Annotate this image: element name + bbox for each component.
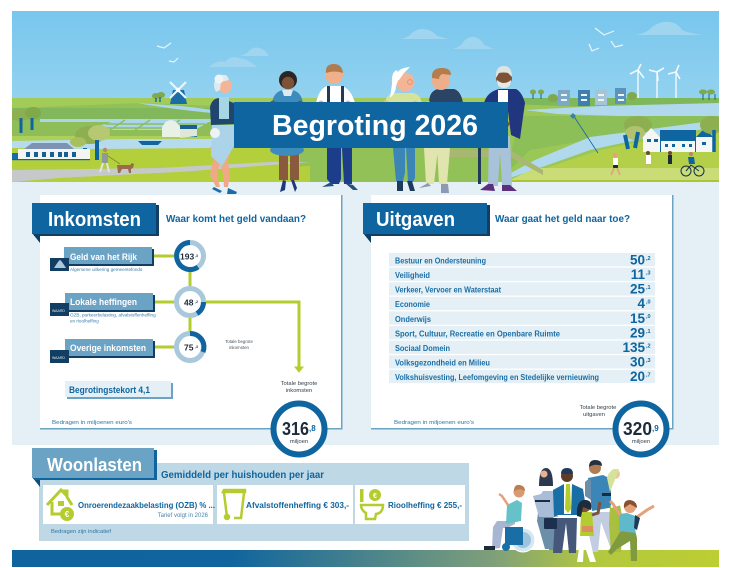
table of expenditures: 30 (630, 355, 645, 370)
central building (162, 120, 197, 138)
table of expenditures (389, 252, 655, 384)
heading tab Woonlasten: Woonlasten (47, 454, 142, 475)
light background band (12, 182, 719, 445)
card: Onroerendezaakbelasting: Tarief volgt in 2026 (158, 513, 209, 519)
table of expenditures: Bestuur en Ondersteuning (395, 256, 486, 266)
apartment blocks (530, 88, 715, 106)
table of expenditures: Economie (395, 299, 430, 309)
clouds (209, 22, 703, 67)
ground (12, 103, 502, 182)
card: Afvalstoffenheffing: Afvalstoffenheffing € 303,- (246, 501, 349, 510)
heading tab Inkomsten: Inkomsten (48, 209, 141, 231)
card: Onroerendezaakbelasting: Onroerendezaakbelasting (OZB) % ... (78, 501, 215, 510)
label Lokale heffingen: OZB, parkeerbelasting, afvalstoffenheffing (70, 312, 156, 318)
donut 193.3: 193 (180, 252, 194, 262)
subheading: Gemiddeld per huishouden per jaar (161, 470, 324, 481)
table of expenditures: 4 (637, 296, 645, 311)
person: man with navy sweater (419, 68, 463, 193)
total circle 320.9 miljoen (616, 404, 666, 454)
total label Inkomsten: inkomsten (286, 388, 312, 394)
playing children (646, 151, 672, 166)
connector lines and arrow (153, 256, 303, 372)
kite (570, 113, 598, 153)
person: woman with blue dress (270, 71, 304, 192)
small note Totale begrote inkomsten: inkomsten (229, 345, 250, 350)
card: Rioolheffing: Rioolheffing € 255,- (388, 501, 462, 510)
donut 48.2: 48 (184, 298, 194, 308)
cyclist (681, 152, 704, 176)
person: young man with suspenders (316, 64, 358, 190)
right side land (524, 105, 578, 108)
heading tab Uitgaven (363, 203, 490, 243)
table of expenditures: ,2 (646, 256, 651, 262)
left trees (11, 107, 110, 160)
banner title (234, 102, 508, 148)
person: woman with white ponytail (383, 67, 422, 191)
panel: Inkomsten (32, 195, 342, 430)
total circle 320.9 miljoen: miljoen (632, 439, 650, 445)
panel: Woonlasten (32, 448, 469, 541)
banner title: Begroting 2026 (272, 110, 478, 142)
label Lokale heffingen: Lokale heffingen (70, 297, 137, 307)
table of expenditures: Verkeer, Vervoer en Waterstaat (395, 285, 501, 295)
total label Inkomsten (281, 381, 317, 394)
table of expenditures: ,1 (646, 285, 651, 291)
girl with bag (577, 500, 600, 562)
panel: Uitgaven (363, 195, 674, 430)
table of expenditures: ,3 (646, 358, 651, 364)
heading tab Uitgaven: Uitgaven (376, 209, 455, 231)
donut 75.3 (174, 331, 206, 363)
total label Uitgaven: uitgaven (583, 412, 605, 418)
box Begrotingstekort (65, 381, 173, 399)
table of expenditures: 11 (631, 267, 645, 282)
table of expenditures: 50 (630, 252, 645, 268)
tree pair near mill (152, 92, 165, 99)
question Inkomsten: Waar komt het geld vandaan? (166, 214, 306, 225)
table of expenditures: ,3 (646, 270, 651, 276)
footnote Uitgaven: Bedragen in miljoenen euro's (394, 420, 474, 426)
table of expenditures: ,0 (646, 300, 651, 306)
bottom gradient bar (12, 550, 719, 567)
rivers (137, 103, 212, 113)
donut 193.3: ,3 (195, 254, 198, 258)
table of expenditures: 15 (630, 311, 645, 326)
woman with headscarf (533, 468, 558, 550)
wheelchair user (484, 485, 535, 552)
label Lokale heffingen: en rioolheffing (70, 318, 99, 324)
runner (611, 153, 620, 175)
label Overige inkomsten: Overige inkomsten (70, 343, 146, 353)
total circle 316.8 miljoen: 316 (282, 419, 309, 439)
table of expenditures: Sport, Cultuur, Recreatie en Openbare Ruimte (395, 328, 560, 338)
fence (440, 150, 543, 175)
label Geld van het Rijk: Algemene uitkering gemeentefonds (70, 267, 143, 272)
total circle 320.9 miljoen: ,9 (652, 424, 659, 433)
icon: toilet with euro: € (373, 493, 377, 500)
total label Inkomsten: Totale begrote (281, 381, 317, 387)
table of expenditures: Veiligheid (395, 270, 430, 280)
birds (157, 28, 623, 62)
label Overige inkomsten (50, 339, 155, 363)
total label Uitgaven (580, 405, 616, 418)
illustration: group of diverse people (484, 460, 654, 562)
small note Totale begrote inkomsten: Totale begrote (225, 339, 253, 344)
person: older man with white hair and jacket (478, 66, 525, 191)
dog walker (100, 148, 134, 173)
hero illustration: landscape (11, 11, 724, 182)
table of expenditures: ,7 (646, 372, 651, 378)
table of expenditures: 29 (630, 325, 645, 340)
total label Uitgaven: Totale begrote (580, 405, 616, 411)
label Overige inkomsten: WAARD (52, 356, 65, 360)
donut 48.2 (174, 286, 206, 318)
wind turbines (630, 64, 680, 98)
label Lokale heffingen (50, 293, 156, 324)
housing row with trees (624, 116, 724, 152)
table of expenditures: Volkshuisvesting, Leefomgeving en Stedelijke vernieuwing (395, 372, 599, 382)
icon: house with euro: € (65, 510, 70, 519)
card: Onroerendezaakbelasting (43, 485, 215, 524)
table of expenditures: Onderwijs (395, 314, 431, 324)
table of expenditures: 25 (630, 282, 645, 297)
donut 48.2: ,2 (195, 300, 198, 304)
question Uitgaven: Waar gaat het geld naar toe? (495, 214, 630, 225)
heading tab Inkomsten (32, 203, 159, 243)
label Geld van het Rijk (50, 247, 154, 272)
table of expenditures: 135 (622, 340, 645, 355)
man in suit with briefcase (544, 468, 587, 553)
total circle 316.8 miljoen: ,8 (309, 424, 316, 433)
icon: waste bin (223, 490, 245, 519)
small note Totale begrote inkomsten (225, 339, 253, 350)
table of expenditures: 20 (630, 369, 645, 384)
box Begrotingstekort: Begrotingstekort 4,1 (69, 385, 150, 395)
table of expenditures: Sociaal Domein (395, 343, 450, 353)
table of expenditures: ,2 (646, 344, 651, 350)
donut 193.3 (174, 240, 206, 272)
donut 75.3: ,3 (195, 345, 198, 349)
boy cheering (608, 500, 654, 561)
table of expenditures: Volksgezondheid en Milieu (395, 358, 490, 368)
total circle 316.8 miljoen (274, 404, 324, 454)
icon: house with euro (47, 490, 74, 521)
boat (138, 141, 162, 145)
mill (170, 82, 187, 104)
person: older woman with white hair (210, 74, 240, 194)
footnote Woonlasten: Bedragen zijn indicatief (51, 529, 111, 535)
card: Afvalstoffenheffing (217, 485, 353, 524)
total circle 316.8 miljoen: miljoen (290, 439, 308, 445)
table of expenditures: ,1 (646, 329, 651, 335)
footnote Inkomsten: Bedragen in miljoenen euro's (52, 420, 132, 426)
table of expenditures: ,0 (646, 314, 651, 320)
blonde woman (607, 469, 625, 552)
heading tab Woonlasten (32, 448, 157, 487)
left farm building (12, 143, 90, 160)
label Geld van het Rijk: Geld van het Rijk (70, 252, 137, 262)
card: Rioolheffing (355, 485, 465, 524)
man with phone (585, 460, 621, 552)
total circle 320.9 miljoen: 320 (623, 419, 652, 439)
donut 75.3: 75 (184, 342, 194, 352)
label Lokale heffingen: WAARD (52, 309, 65, 313)
